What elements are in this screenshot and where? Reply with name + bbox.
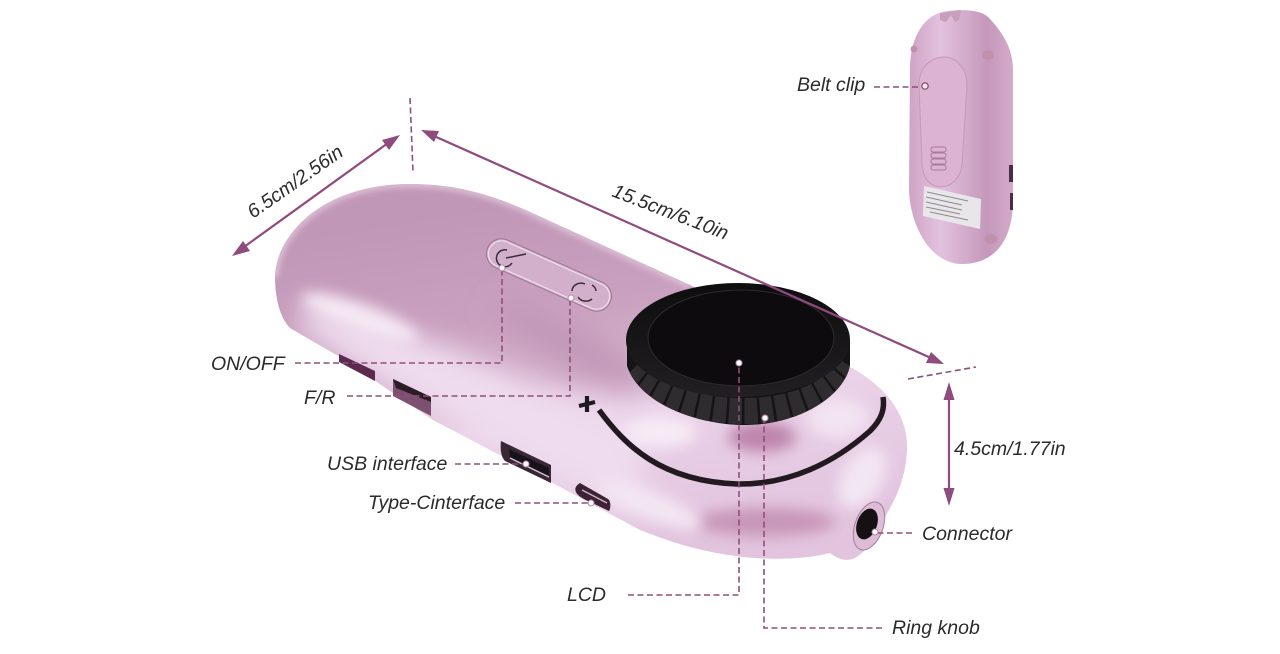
ring knob bbox=[627, 340, 850, 425]
arrow: width bbox=[232, 135, 400, 256]
callout: F/R bbox=[304, 295, 574, 409]
icon: power bbox=[496, 250, 526, 267]
body shading bbox=[275, 184, 896, 539]
icon: forward reverse bbox=[572, 283, 596, 301]
arrow: height: 4.5cm/1.77in bbox=[954, 438, 1066, 460]
connector jack bbox=[847, 498, 891, 554]
arrow: length bbox=[421, 130, 944, 364]
callout: LCD: LCD bbox=[567, 584, 606, 606]
port: ON/OFF bbox=[339, 354, 375, 381]
callout: Type-C interface: Type-Cinterface bbox=[368, 492, 505, 514]
knob bbox=[626, 283, 850, 425]
arrow: length: 15.5cm/6.10in bbox=[609, 180, 731, 245]
screw holes bbox=[910, 46, 998, 244]
callout: LCD bbox=[567, 360, 742, 606]
button panel bbox=[482, 234, 616, 316]
back body bbox=[909, 10, 1013, 264]
black dial arc bbox=[599, 397, 883, 484]
rating label bbox=[923, 186, 981, 229]
callout: Connector bbox=[872, 523, 1013, 545]
ports bbox=[339, 354, 610, 511]
callout: Type-C interface bbox=[368, 492, 594, 514]
LCD cap bbox=[626, 283, 850, 397]
back view device bbox=[909, 10, 1013, 264]
port: Type-C bbox=[575, 483, 610, 511]
callout: USB interface: USB interface bbox=[327, 453, 447, 475]
main device bbox=[275, 184, 907, 560]
callout: Belt clip: Belt clip bbox=[797, 74, 865, 96]
plus mark bbox=[579, 396, 595, 412]
callout: ON/OFF: ON/OFF bbox=[211, 353, 286, 375]
callout: Ring knob bbox=[762, 415, 980, 639]
callout: F/R: F/R bbox=[304, 387, 335, 409]
callout: USB interface bbox=[327, 453, 529, 475]
callout: ON/OFF bbox=[211, 265, 505, 375]
arrow: width: 6.5cm/2.56in bbox=[243, 141, 347, 223]
clip grip bbox=[931, 147, 946, 170]
callout: Connector: Connector bbox=[922, 523, 1013, 545]
device body bbox=[275, 184, 907, 560]
dimension arrows bbox=[232, 98, 1066, 506]
side ports bbox=[1009, 165, 1013, 210]
port: USB bbox=[501, 441, 551, 483]
callout: Belt clip bbox=[797, 74, 928, 96]
arrow: height bbox=[944, 382, 1066, 506]
belt clip panel bbox=[919, 57, 967, 187]
port: F/R bbox=[393, 379, 431, 416]
callout: Ring knob: Ring knob bbox=[892, 617, 980, 639]
